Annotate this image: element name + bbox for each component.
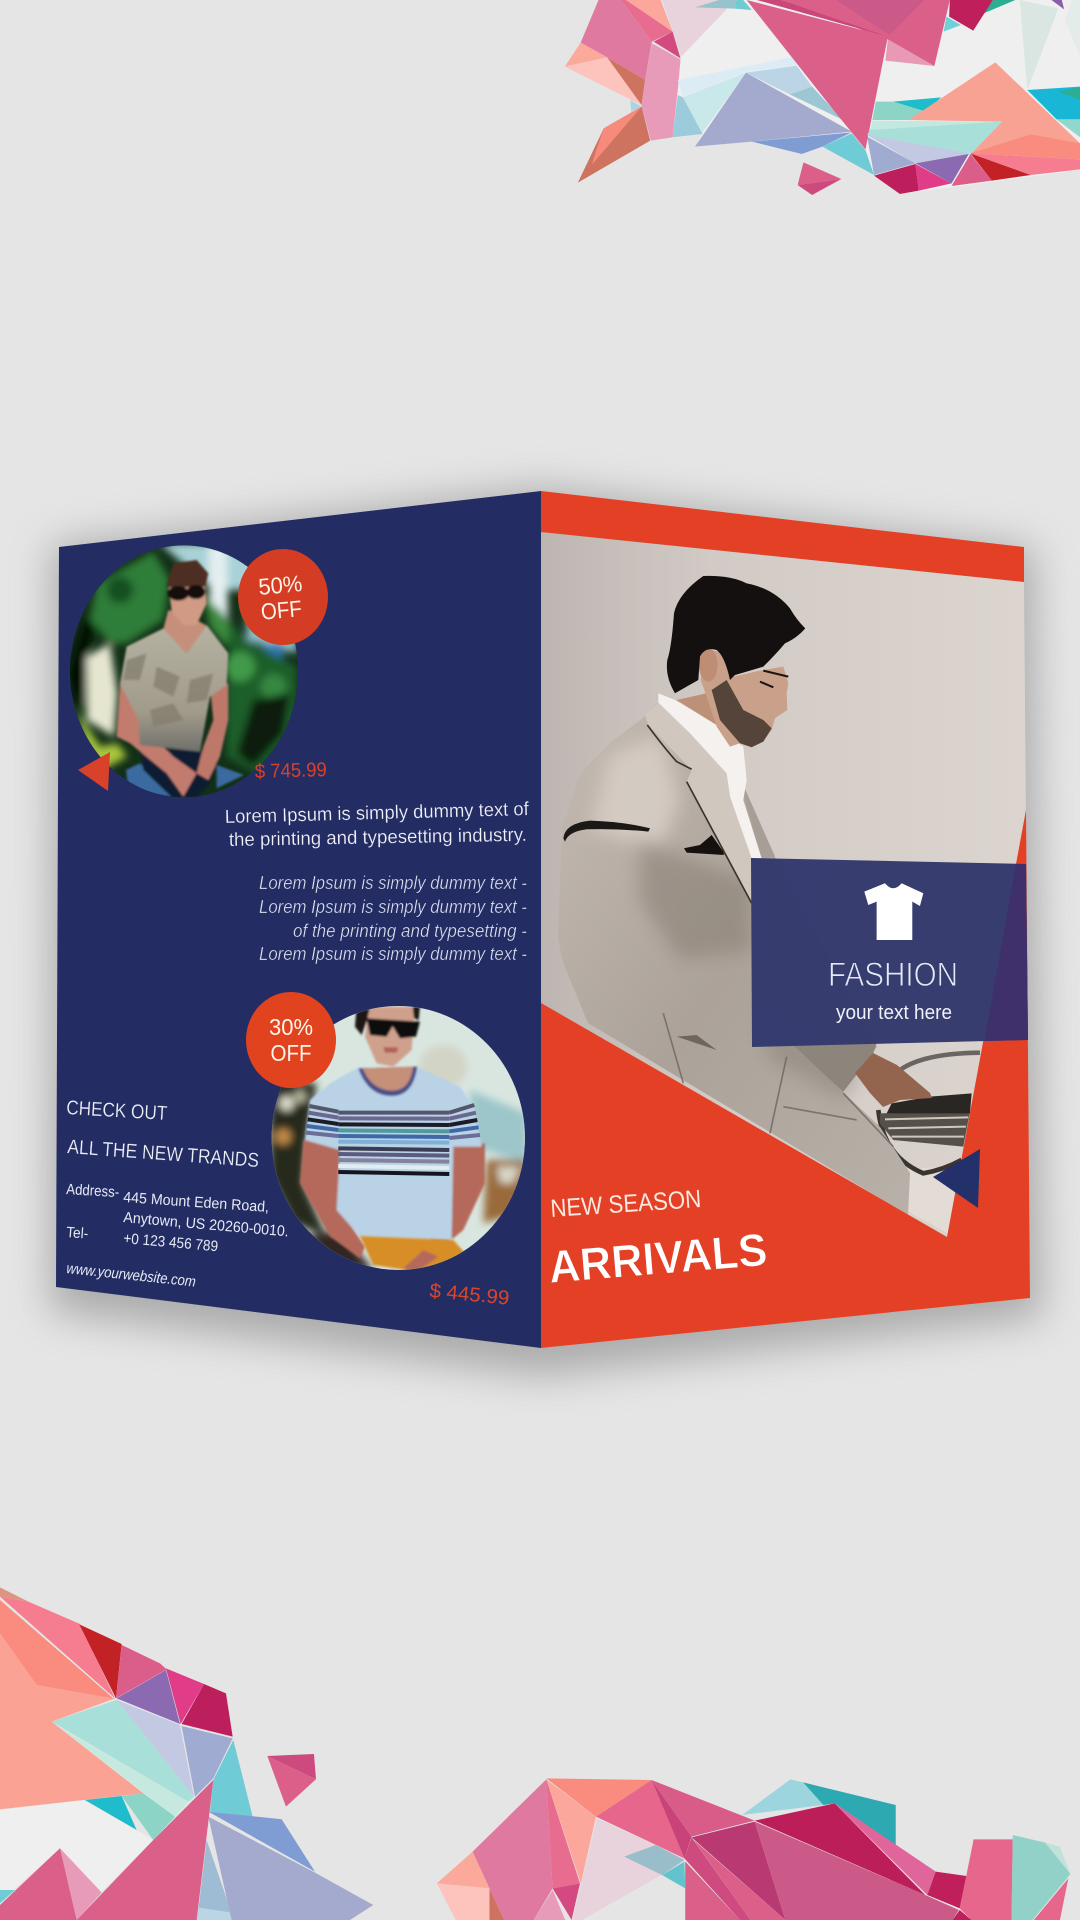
- badge: 50% off: [238, 549, 328, 645]
- italic list text: Lorem Ipsum is simply dummy text -: [259, 897, 527, 917]
- shoulder highlight: [590, 735, 680, 850]
- website: www.yourwebsite.com: [66, 1260, 197, 1291]
- jeans: [126, 763, 172, 797]
- lower wall: [905, 1165, 960, 1240]
- stool: [878, 1053, 980, 1173]
- panel background: navy: [56, 491, 541, 1348]
- label: your text here: your text here: [836, 1002, 952, 1024]
- label: fashion: FASHION: [828, 956, 958, 994]
- italic list text: Lorem Ipsum is simply dummy text -: [259, 944, 527, 964]
- fashion box: [751, 858, 1028, 1047]
- sleeve shadow: [640, 840, 750, 960]
- brochure shadow: [50, 488, 1042, 1376]
- badge: 30% off: OFF: [270, 1040, 312, 1066]
- shirt: [305, 1067, 482, 1241]
- forearm sleeve shade: [663, 1013, 893, 1147]
- intro text: Lorem Ipsum is simply dummy text of: [225, 799, 530, 828]
- photo: man in floral t-shirt: [67, 543, 303, 800]
- badge: 50% off: 50%: [257, 570, 303, 600]
- photo background: wall: [541, 532, 1030, 1348]
- orange lower shape: [541, 810, 1030, 1348]
- head: [365, 1007, 415, 1067]
- arrow: navy triangle: [933, 1149, 980, 1208]
- contact details: Anytown, US 20260-0010.: [123, 1209, 290, 1240]
- icon: t-shirt: [864, 883, 923, 940]
- decoration: top right polygons: [565, 0, 1080, 195]
- photo: man in grey suit: [558, 576, 980, 1240]
- photo: man in striped t-shirt: [270, 1003, 527, 1273]
- shorts: [360, 1236, 468, 1272]
- stripes: [306, 1105, 480, 1174]
- italic list text: [259, 873, 527, 964]
- decoration: bottom left polygons: [0, 1587, 373, 1920]
- heading: new season: NEW SEASON: [550, 1185, 702, 1223]
- price: 745.99: $ 745.99: [255, 759, 327, 783]
- heading: check out: [66, 1097, 260, 1172]
- arms: [300, 1140, 365, 1258]
- upper body details: [563, 576, 805, 903]
- orange top bar: [541, 491, 1024, 582]
- hand: [855, 1053, 932, 1107]
- badge: 30% off: 30%: [269, 1014, 313, 1040]
- contact details: 445 Mount Eden Road,: [123, 1189, 270, 1216]
- neck and head: [163, 610, 207, 653]
- italic list text: Lorem Ipsum is simply dummy text -: [259, 873, 527, 893]
- intro text: [225, 799, 530, 851]
- contact details: Tel-: [66, 1224, 89, 1243]
- box right tint: [985, 864, 1028, 1041]
- intro text: the printing and typesetting industry.: [229, 825, 527, 851]
- contact details: +0 123 456 789: [123, 1230, 219, 1255]
- heading: check out: ALL THE NEW TRANDS: [67, 1136, 260, 1172]
- decoration: bottom right polygons: [437, 1778, 1070, 1920]
- leg shadow: [760, 1010, 860, 1100]
- brochure left panel: [56, 491, 541, 1348]
- shirt: [120, 625, 228, 752]
- arms: [117, 683, 197, 797]
- heading: arrivals: ARRIVALS: [547, 1223, 769, 1293]
- suit: [558, 703, 910, 1215]
- brochure right panel: [541, 491, 1030, 1348]
- italic list text: of the printing and typesetting -: [293, 921, 527, 941]
- price: 445.99: $ 445.99: [429, 1280, 510, 1310]
- contact details: Address-: [66, 1181, 120, 1201]
- arrow: orange triangle: [78, 752, 110, 791]
- heading: check out: CHECK OUT: [66, 1097, 168, 1125]
- badge: 50% off: OFF: [260, 595, 303, 625]
- badge: 30% off: [246, 992, 336, 1088]
- contact details: [66, 1181, 290, 1255]
